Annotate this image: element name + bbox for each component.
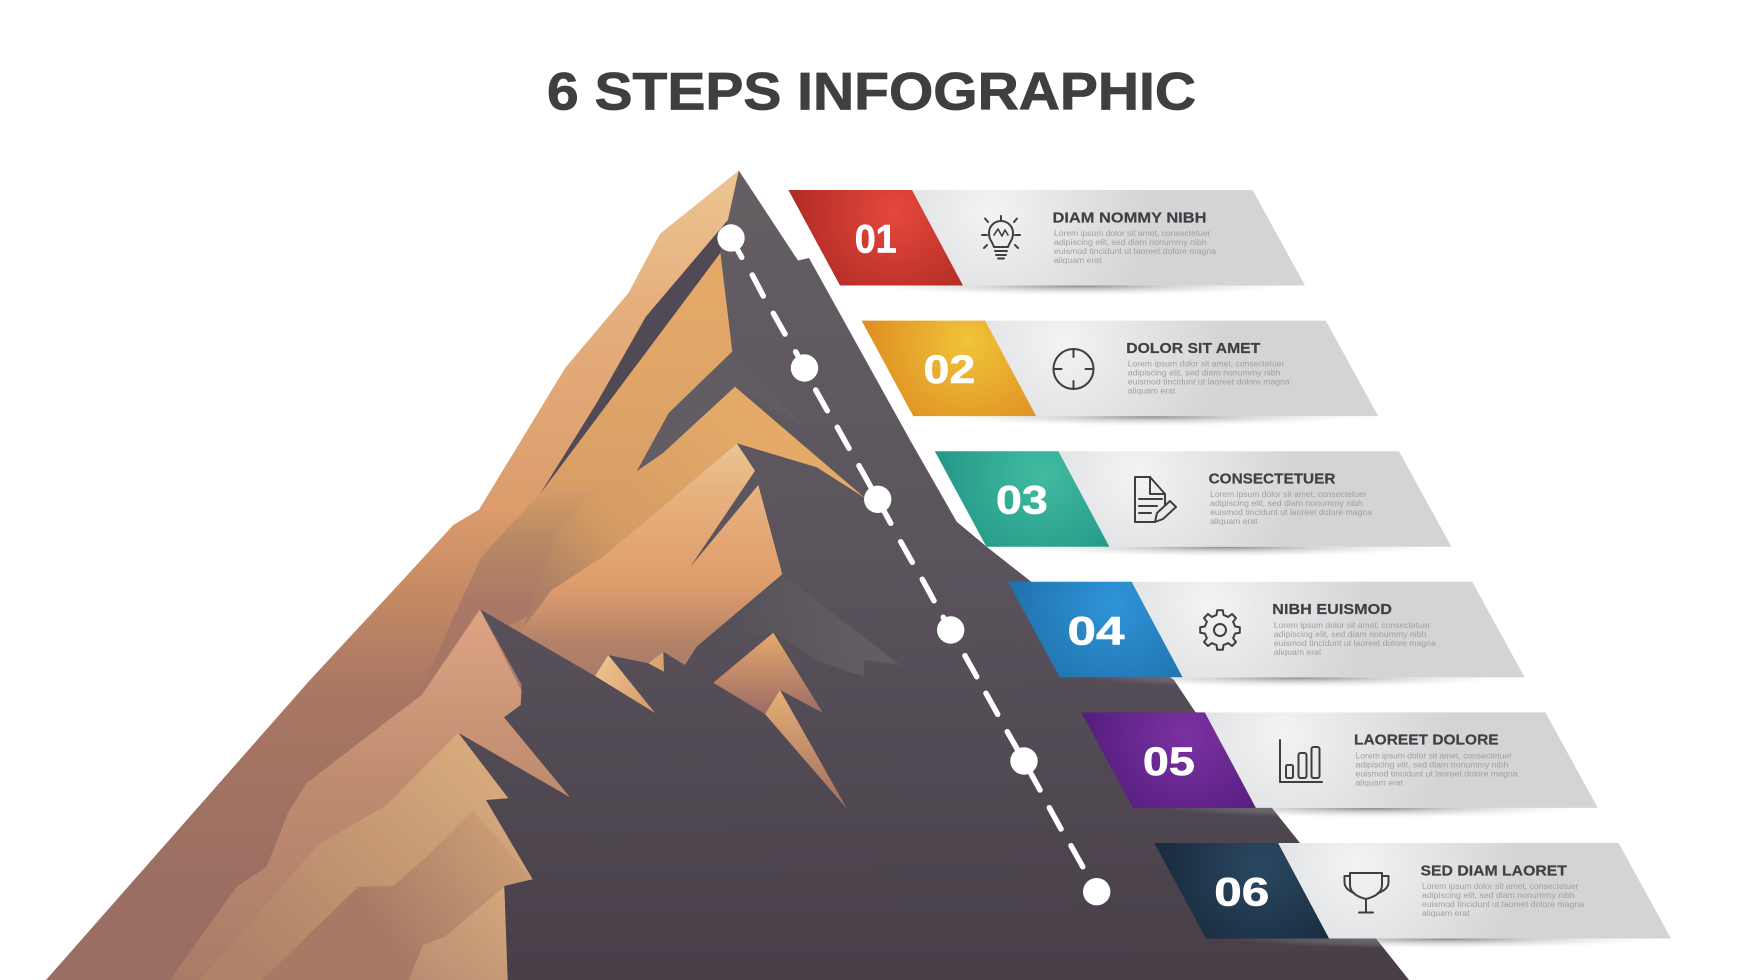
icon: bar chart <box>1280 740 1322 782</box>
dark mountain face <box>508 170 1409 980</box>
description: aliquam erat <box>1356 778 1404 787</box>
number: 01 <box>855 218 897 262</box>
lower facet <box>697 574 900 677</box>
dark crevice <box>540 220 728 494</box>
icon: trophy <box>1344 873 1388 912</box>
description: euismod tincidunt ut laoreet dolore magna <box>1356 769 1518 778</box>
left foreground rock <box>170 609 570 980</box>
orange shard left <box>595 655 655 713</box>
heading: LAOREET DOLORE <box>1354 732 1499 749</box>
orange shard small <box>648 652 664 672</box>
banner shapes <box>1154 843 1671 958</box>
banner shapes <box>1008 582 1525 697</box>
banner shapes <box>1081 712 1598 828</box>
dashed route <box>731 238 1083 867</box>
number: 05 <box>1143 740 1195 784</box>
banner shapes <box>788 190 1305 306</box>
description: aliquam erat <box>1210 517 1258 526</box>
step 02 banner <box>862 321 1378 436</box>
description <box>1356 751 1518 787</box>
middle ridge face <box>393 252 735 717</box>
description: adipiscing elit, sed diam nonummy nibh <box>1356 760 1508 769</box>
back silhouette <box>46 170 750 980</box>
orange triangle right <box>713 633 823 714</box>
central peak <box>500 443 782 680</box>
description: adipiscing elit, sed diam nonummy nibh <box>1128 369 1280 378</box>
upper facet <box>637 352 807 471</box>
description: aliquam erat <box>1054 256 1102 265</box>
description: adipiscing elit, sed diam nonummy nibh <box>1210 499 1363 508</box>
description: Lorem ipsum dolor sit amet, consectetuer <box>1422 882 1579 891</box>
step 06 banner <box>1154 843 1671 958</box>
step 04 banner <box>1008 582 1525 697</box>
heading: NIBH EUISMOD <box>1272 601 1392 618</box>
description <box>1128 360 1290 396</box>
banner shapes <box>935 451 1451 567</box>
lower rock <box>200 733 533 980</box>
description: Lorem ipsum dolor sit amet, consectetuer <box>1128 360 1285 369</box>
bottom light rock <box>408 887 508 980</box>
number: 06 <box>1214 870 1269 914</box>
description: euismod tincidunt ut laoreet dolore magna <box>1210 508 1373 517</box>
icon: light bulb <box>982 216 1020 258</box>
orange ridge <box>523 387 865 628</box>
route stop circles <box>717 224 1110 905</box>
number: 02 <box>924 348 975 392</box>
icon: document and pencil <box>1135 477 1176 522</box>
description: euismod tincidunt ut laoreet dolore magna <box>1128 378 1290 387</box>
description <box>1274 621 1436 657</box>
description: euismod tincidunt ut laoreet dolore magna <box>1054 247 1217 256</box>
foreground dark rock <box>458 609 1100 980</box>
step 01 banner <box>788 190 1305 306</box>
description: aliquam erat <box>1422 909 1470 918</box>
title: 6 STEPS INFOGRAPHIC <box>547 62 1196 122</box>
small facet near slit <box>755 470 787 513</box>
description: euismod tincidunt ut laoreet dolore magna <box>1274 639 1436 648</box>
description: adipiscing elit, sed diam nonummy nibh <box>1054 238 1207 247</box>
heading: CONSECTETUER <box>1209 470 1336 488</box>
description <box>1054 229 1217 265</box>
banner shapes <box>862 321 1378 436</box>
number: 04 <box>1068 609 1125 653</box>
description: Lorem ipsum dolor sit amet, consectetuer <box>1210 490 1367 499</box>
heading: DIAM NOMMY NIBH <box>1052 209 1206 226</box>
heading: DOLOR SIT AMET <box>1126 340 1260 357</box>
description <box>1422 882 1585 918</box>
description: Lorem ipsum dolor sit amet, consectetuer <box>1356 751 1512 760</box>
description: euismod tincidunt ut laoreet dolore magna <box>1422 900 1585 909</box>
description: adipiscing elit, sed diam nonummy nibh <box>1274 630 1426 639</box>
description: adipiscing elit, sed diam nonummy nibh <box>1422 891 1575 900</box>
icon: gear <box>1200 610 1240 650</box>
orange shard lower <box>765 690 847 809</box>
heading: SED DIAM LAORET <box>1420 862 1567 879</box>
number: 03 <box>996 479 1048 523</box>
shadowed rock band <box>262 810 532 980</box>
icon: crosshair <box>1054 349 1094 389</box>
description: aliquam erat <box>1274 648 1322 657</box>
description: aliquam erat <box>1128 387 1176 396</box>
description <box>1210 490 1373 526</box>
description: Lorem ipsum dolor sit amet, consectetuer <box>1274 621 1431 630</box>
step 05 banner <box>1081 712 1598 828</box>
step 03 banner <box>935 451 1451 567</box>
description: Lorem ipsum dolor sit amet, consectetuer <box>1054 229 1211 238</box>
mountain illustration <box>46 170 1409 980</box>
